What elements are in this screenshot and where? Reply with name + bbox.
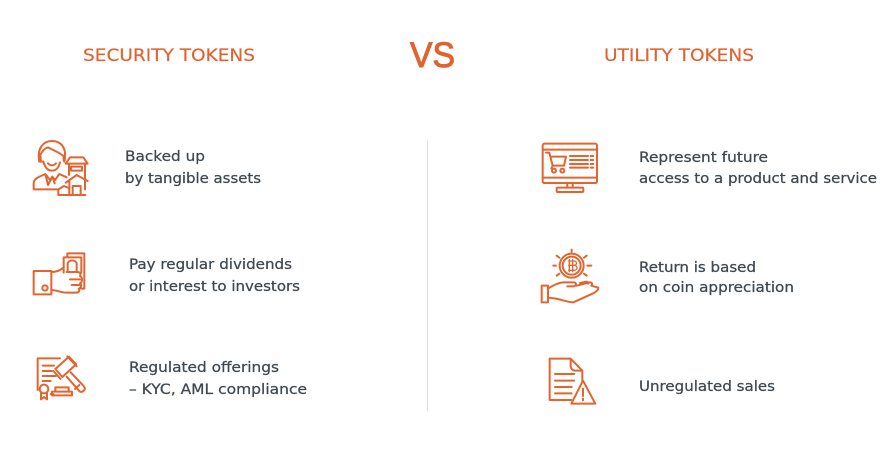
heading: security tokens: SECURITY TOKENS bbox=[83, 46, 255, 65]
icon: monitor with shopping cart bbox=[543, 144, 597, 192]
text: backed up: by tangible assets bbox=[125, 171, 261, 187]
icon: hand with bitcoin coin bbox=[542, 250, 598, 302]
text: regulated offerings bbox=[129, 360, 307, 398]
text: regulated offerings: Regulated offerings bbox=[129, 360, 279, 376]
icon: certificate and gavel bbox=[38, 356, 85, 399]
text: return is based: on coin appreciation bbox=[639, 280, 794, 296]
text: regulated offerings: – KYC, AML compliance bbox=[129, 382, 307, 398]
center divider bbox=[427, 140, 428, 411]
text: unregulated sales: Unregulated sales bbox=[639, 379, 775, 395]
text: pay regular dividends: or interest to investors bbox=[129, 279, 300, 295]
text: pay regular dividends bbox=[129, 257, 300, 295]
icon: document with warning bbox=[550, 359, 595, 404]
text: backed up: Backed up bbox=[125, 149, 205, 165]
text: represent future bbox=[639, 150, 877, 187]
text: represent future: Represent future bbox=[639, 150, 768, 166]
text: represent future: access to a product and service bbox=[639, 171, 877, 187]
icon: hand holding money bbox=[34, 253, 84, 294]
text: return is based bbox=[639, 260, 794, 296]
text: pay regular dividends: Pay regular dividends bbox=[129, 257, 292, 273]
heading: VS: VS bbox=[410, 36, 455, 75]
text: backed up bbox=[125, 149, 261, 187]
icon: person with house bbox=[34, 141, 88, 195]
text: return is based: Return is based bbox=[639, 260, 756, 276]
heading: utility tokens: UTILITY TOKENS bbox=[604, 46, 754, 65]
